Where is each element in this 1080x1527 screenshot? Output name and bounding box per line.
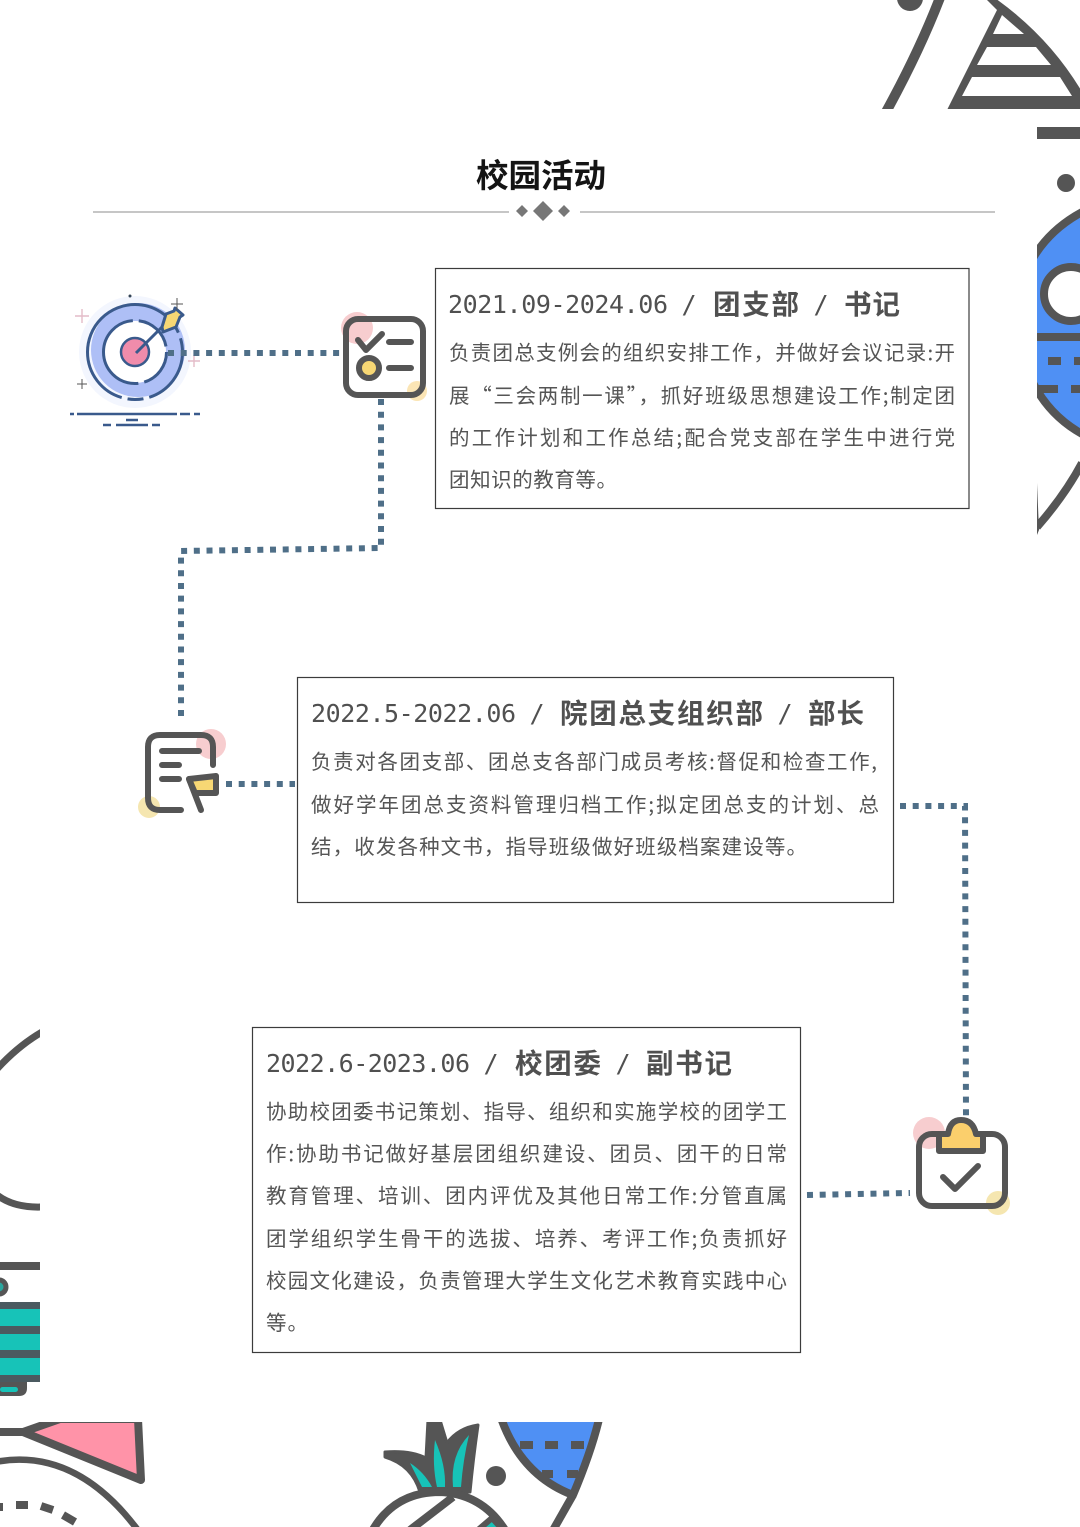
card 3 heading [266,1041,732,1081]
decoration: bottom dot [486,1466,506,1486]
card 2 body: 结，收发各种文书，指导班级做好班级档案建设等。 [311,830,807,860]
title: 校园活动 [476,158,606,194]
title divider [93,201,995,221]
card 2 body [311,745,879,860]
card 3 body: 教育管理、培训、团内评优及其他日常工作:分管直属 [266,1179,787,1209]
decoration: right bar and dot [1037,127,1080,192]
card 1 [436,268,969,508]
card 3 body: 团学组织学生骨干的选拔、培养、考评工作;负责抓好 [266,1222,787,1252]
decoration: bottom pineapple [370,1420,508,1527]
card 1 body: 负责团总支例会的组织安排工作，并做好会议记录:开 [449,336,955,366]
card 3 body: 校园文化建设，负责管理大学生文化艺术教育实践中心 [266,1264,787,1294]
card 1 heading: / [682,290,697,319]
connector: checklist to document [181,399,381,720]
card 1 body [449,336,955,493]
decoration: bottom blue fish [500,1415,600,1527]
card 1 heading: 2021.09-2024.06 [448,290,668,319]
icon: target with arrow [70,294,200,425]
icon: checklist [341,312,427,401]
card 3 body [266,1095,787,1336]
card 3 body: 等。 [266,1306,308,1336]
card 1 heading: / [814,290,829,319]
card 3 heading: 2022.6-2023.06 [266,1049,470,1078]
card 2 heading: 院团总支组织部 [560,691,763,731]
card 3 body: 协助校团委书记策划、指导、组织和实施学校的团学工 [266,1095,787,1125]
card 1 body: 团知识的教育等。 [449,463,617,493]
icon: document with flag [138,729,226,818]
card 1 heading: 书记 [844,282,900,322]
card 2 heading: 部长 [808,691,864,731]
decoration: right blue fish [1033,208,1080,535]
card 2 [298,678,894,902]
connector: clipboard to card 3 [807,1193,910,1195]
connector: document to card 2 [226,781,295,787]
decoration: bottom left pink triangle and arc [0,1419,145,1527]
card 3 heading: 副书记 [646,1041,732,1081]
card 2 heading: / [778,699,793,728]
card 1 heading: 团支部 [713,282,799,322]
card 3 heading: / [484,1049,499,1078]
card 2 heading: / [530,699,545,728]
card 2 body: 负责对各团支部、团总支各部门成员考核:督促和检查工作, [311,745,877,775]
connector: target to checklist [168,350,342,356]
card 1 body: 的工作计划和工作总结;配合党支部在学生中进行党 [449,421,955,451]
card 1 heading [448,282,900,322]
card 3 heading: / [616,1049,631,1078]
decoration: top right triangle [886,0,1080,112]
card 3 [252,1028,800,1352]
connector: card 2 to clipboard [900,806,966,1116]
card 2 heading: 2022.5-2022.06 [311,699,516,728]
card 1 body: 展“三会两制一课”，抓好班级思想建设工作;制定团 [449,379,955,409]
card 2 body: 做好学年团总支资料管理归档工作;拟定团总支的计划、总 [311,788,879,818]
card 3 heading: 校团委 [515,1041,601,1081]
icon: clipboard with check [913,1117,1010,1215]
decoration: left shapes [0,1032,42,1396]
card 2 heading [311,691,864,731]
card 3 body: 作:协助书记做好基层团组织建设、团员、团干的日常 [266,1137,787,1167]
